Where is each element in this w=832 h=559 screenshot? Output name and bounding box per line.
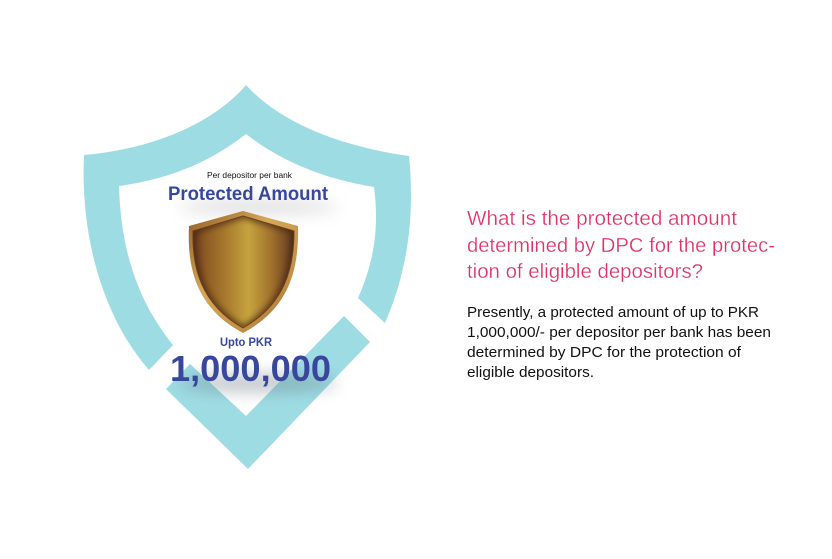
text block: answer: Presently, a protected amount of up to PKR bbox=[467, 305, 759, 321]
text: upto PKR: Upto PKR bbox=[220, 337, 273, 349]
heading: question: determined by DPC for the protec- bbox=[467, 235, 775, 257]
text block: answer: eligible depositors. bbox=[467, 365, 594, 381]
text block: answer: determined by DPC for the protection of bbox=[467, 345, 742, 361]
text: per depositor per bank: Per depositor per bank bbox=[207, 170, 293, 180]
icon: teal check mark bbox=[166, 316, 370, 469]
text block: answer: 1,000,000/- per depositor per bank has been bbox=[467, 325, 771, 341]
icon: large teal shield outline bbox=[84, 85, 411, 370]
shadow: amount figure bbox=[178, 374, 338, 392]
heading: question: tion of eligible depositors? bbox=[467, 261, 703, 283]
heading: protected amount: Protected Amount bbox=[168, 184, 329, 205]
heading: question bbox=[467, 208, 775, 283]
shadow: protected amount bbox=[178, 201, 338, 213]
heading: question: What is the protected amount bbox=[467, 208, 737, 230]
text block: answer bbox=[467, 305, 771, 381]
icon: gold shield bbox=[189, 211, 298, 333]
figure: 1,000,000: 1,000,000 bbox=[170, 348, 331, 389]
